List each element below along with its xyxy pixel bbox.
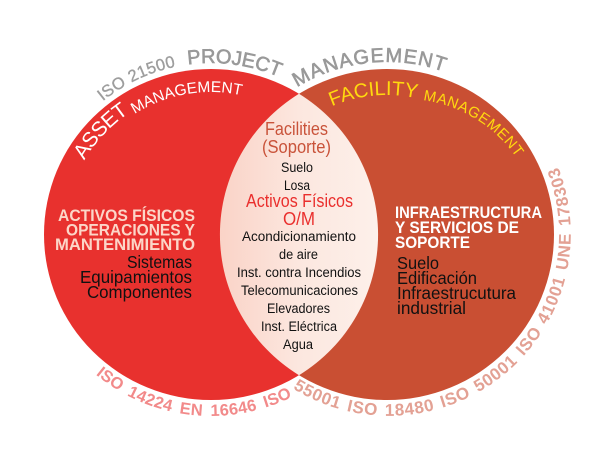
text block: facility list: Edificación — [397, 268, 477, 288]
text block: facility list — [397, 253, 516, 318]
text block: asset heading: ACTIVOS FÍSICOS — [58, 206, 195, 225]
text block: facility heading — [395, 204, 542, 252]
arc label: facility standards: 55001 ISO 18480 ISO 50001 ISO 41001 UNE 178303 — [294, 168, 571, 416]
heading: physical assets O/M: O/M — [283, 209, 315, 229]
text block: facilities list: Suelo — [281, 160, 313, 175]
text block: physical assets list: Agua — [283, 337, 313, 352]
text block: physical assets list: Acondicionamiento — [242, 229, 356, 244]
text block: asset list — [80, 252, 192, 302]
arc heading: management: MANAGEMENT — [291, 48, 448, 87]
text block: physical assets list: Inst. Eléctrica — [261, 319, 337, 334]
text block: facilities list — [281, 160, 313, 193]
heading: facilities support: (Soporte) — [262, 137, 331, 157]
text block: asset heading: OPERACIONES Y — [66, 222, 195, 240]
arc heading: facility: FACILITY — [328, 81, 418, 106]
text block: facilities list: Losa — [284, 178, 310, 193]
arc heading: asset management: MANAGEMENT — [130, 81, 243, 114]
text block: asset list: Equipamientos — [80, 267, 192, 287]
text block: physical assets list: Elevadores — [267, 301, 330, 316]
text block: physical assets list: Telecomunicaciones — [241, 283, 358, 298]
lens overlap: facilities and physical assets — [220, 94, 378, 375]
text block: facility heading: Y SERVICIOS DE — [395, 219, 519, 237]
heading: facilities support — [262, 119, 331, 157]
text block: asset heading — [55, 206, 195, 254]
heading: physical assets O/M — [246, 191, 353, 229]
circle: asset management — [44, 69, 378, 400]
text block: facility list: industrial — [397, 298, 466, 318]
text block: facility heading: SOPORTE — [395, 234, 470, 252]
text block: facility list: Infraestrucutura — [397, 283, 516, 303]
arc heading: asset: ASSET — [75, 102, 124, 160]
text block: asset list: Sistemas — [127, 252, 192, 272]
text block: physical assets list: de aire — [279, 247, 318, 262]
heading: physical assets O/M: Activos Físicos — [246, 191, 353, 211]
arc heading: facility management: MANAGEMENT — [424, 90, 524, 154]
text block: facility list: Suelo — [397, 253, 439, 273]
text block: facility heading: INFRAESTRUCTURA — [395, 204, 542, 222]
arc label: ISO 21500: ISO 21500 — [96, 56, 174, 100]
text block: physical assets list — [237, 229, 361, 352]
circle: facility management — [220, 69, 554, 400]
heading: facilities support: Facilities — [265, 119, 328, 139]
text block: asset list: Componentes — [87, 282, 192, 302]
arc heading: project: PROJECT — [188, 48, 284, 76]
text block: asset heading: MANTENIMIENTO — [55, 236, 195, 254]
arc label: asset standards: ISO 14224 EN 16646 ISO — [96, 366, 290, 416]
text block: physical assets list: Inst. contra Incendios — [237, 265, 361, 280]
